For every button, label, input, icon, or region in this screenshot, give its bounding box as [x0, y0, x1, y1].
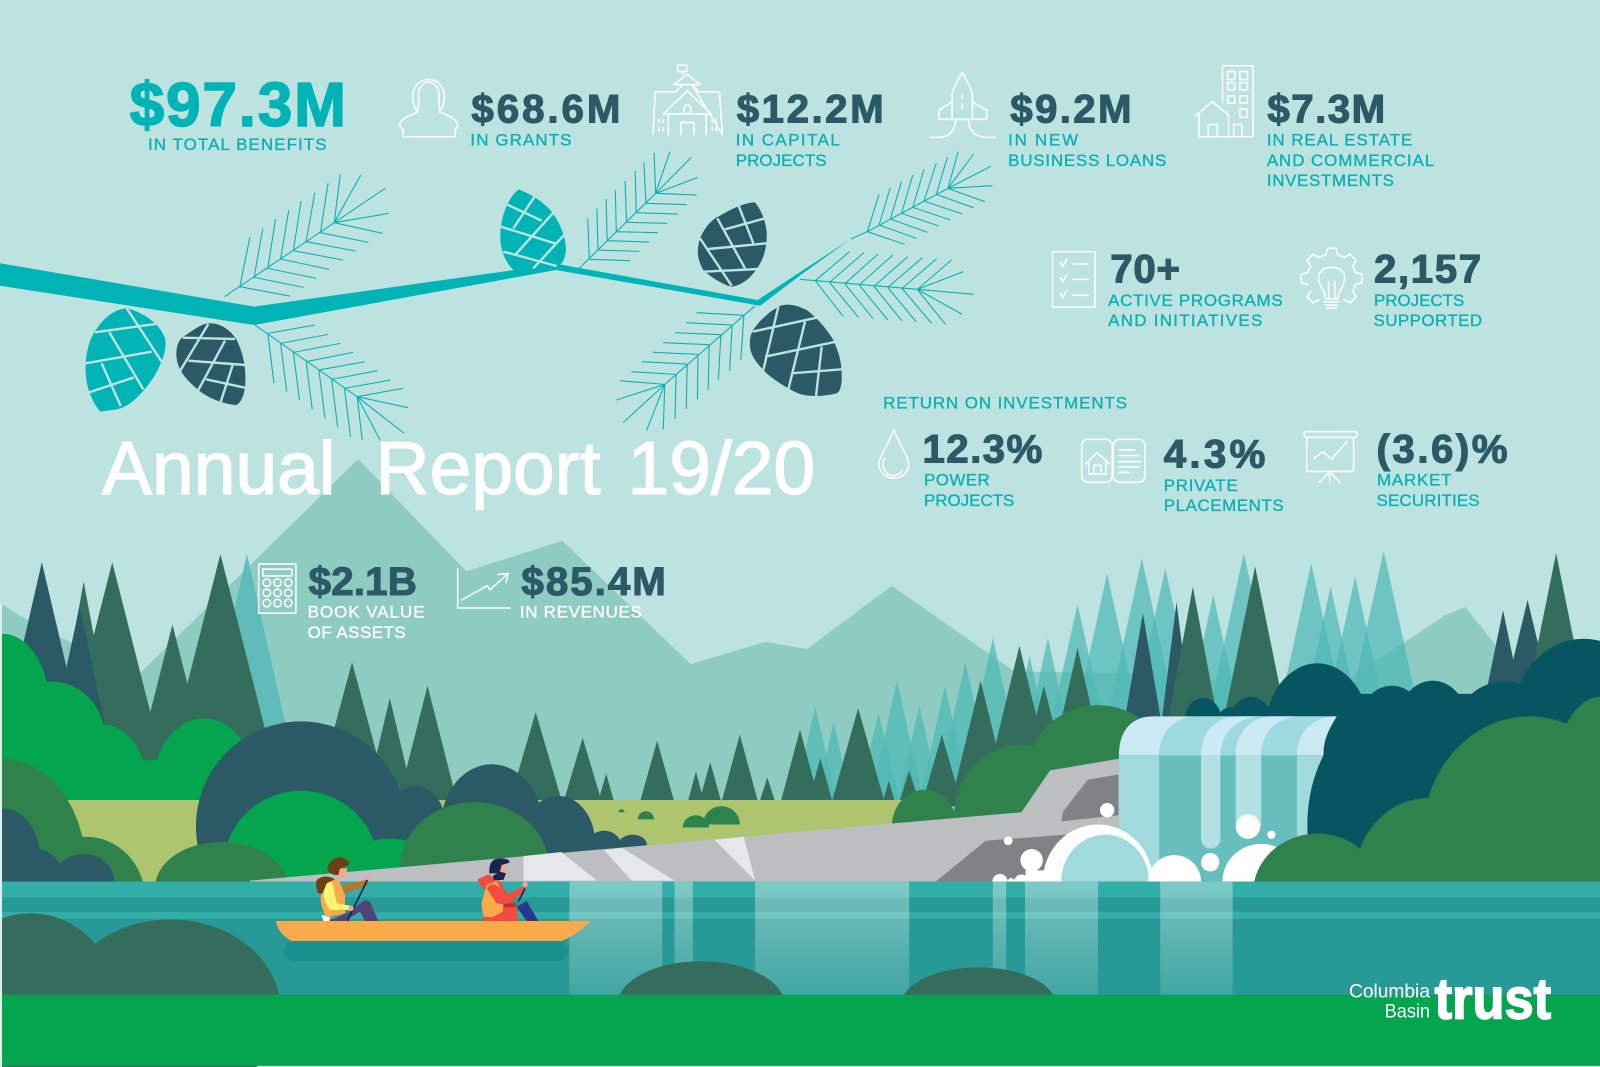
stat: book value: OF ASSETS	[308, 623, 406, 642]
boat hull	[276, 921, 591, 941]
bright inner bushes	[223, 791, 446, 944]
stat: active programs: ACTIVE PROGRAMS	[1108, 291, 1283, 310]
stat: private placements	[1164, 431, 1284, 515]
title: Annual	[102, 426, 336, 510]
icon: rocket	[930, 72, 995, 137]
stat: market securities: MARKET	[1377, 471, 1452, 490]
logo: Columbia Basin Trust: Basin	[1385, 1001, 1430, 1022]
stat: power projects: POWER	[924, 471, 990, 490]
slate trees	[0, 562, 1555, 806]
cone: slate left	[176, 323, 246, 405]
stat: capital projects: $12.2M	[737, 86, 884, 131]
small meadow bushes	[618, 806, 740, 828]
stat: capital projects: PROJECTS	[736, 151, 827, 170]
needles sprig A	[224, 174, 389, 297]
stat: real estate: IN REAL ESTATE	[1267, 131, 1412, 150]
boat with paddlers	[276, 857, 591, 961]
icon: school	[653, 65, 722, 135]
icon: growth chart	[458, 569, 510, 608]
cone: teal left	[86, 308, 166, 412]
dark teal forest	[1185, 639, 1600, 911]
icon: water drop	[879, 430, 909, 478]
pine needles left part	[224, 152, 755, 440]
stat: business loans: $9.2M	[1010, 86, 1132, 131]
teal tree left	[190, 554, 304, 806]
stat: book value: BOOK VALUE	[308, 602, 424, 621]
foam	[992, 803, 1300, 939]
left green bushes	[0, 759, 145, 976]
cone: slate top	[698, 202, 767, 287]
stat: capital projects	[736, 86, 884, 170]
icon: buildings	[1195, 66, 1253, 137]
cones left pair	[86, 308, 246, 412]
slate bush cluster	[196, 721, 647, 932]
stat: projects supported: PROJECTS	[1374, 291, 1464, 310]
stat: power projects: 12.3%	[922, 427, 1042, 472]
stat: total benefits: IN TOTAL BENEFITS	[148, 135, 327, 154]
boat shadow	[284, 941, 568, 961]
left margin strip	[0, 604, 2, 1067]
stat: real estate: INVESTMENTS	[1267, 171, 1394, 190]
stat: real estate: $7.3M	[1267, 86, 1385, 131]
needles sprig E	[800, 252, 973, 324]
icon: gear with bulb	[1301, 248, 1362, 308]
stat: grants: $68.6M	[471, 86, 620, 131]
stat: active programs	[1108, 247, 1283, 330]
stat: real estate: AND COMMERCIAL	[1267, 151, 1434, 170]
stat: market securities: SECURITIES	[1377, 491, 1480, 510]
logo: Columbia Basin Trust: Columbia	[1349, 982, 1430, 1003]
needles sprig B	[255, 325, 408, 440]
meadow	[2, 800, 908, 882]
dark green trees	[56, 553, 1600, 806]
stat: revenues: $85.4M	[521, 559, 666, 604]
green bushes by waterfall	[892, 705, 1169, 888]
green inner bush	[400, 802, 549, 933]
icon: book with house	[1082, 439, 1145, 482]
title: Report	[376, 426, 601, 510]
bright green bushes	[2, 634, 242, 800]
paddler: woman	[316, 857, 378, 921]
icon: calculator	[259, 564, 296, 613]
stat: business loans	[1008, 86, 1166, 170]
rock ledge	[250, 758, 1122, 882]
needles sprig D	[851, 152, 992, 244]
needles sprig C	[579, 152, 698, 268]
logo: Columbia Basin Trust	[1349, 967, 1551, 1031]
stat: market securities	[1377, 427, 1508, 510]
stat: active programs: 70+	[1110, 247, 1180, 292]
small green bush	[155, 842, 288, 934]
stat: projects supported: 2,157	[1374, 247, 1481, 292]
stat: revenues: IN REVENUES	[520, 602, 642, 621]
stat: capital projects: IN CAPITAL	[736, 131, 840, 150]
title: 19/20	[628, 426, 815, 510]
icon: presentation board	[1304, 432, 1357, 482]
stat: grants: IN GRANTS	[470, 131, 571, 150]
water	[2, 882, 1600, 996]
stat: projects supported	[1373, 247, 1482, 330]
water reflections	[569, 882, 1233, 995]
stat: active programs: AND INITIATIVES	[1108, 311, 1262, 330]
heading: return on investments: RETURN ON INVESTMENTS	[883, 394, 1127, 413]
stat: power projects: PROJECTS	[924, 491, 1014, 510]
pine branch	[0, 239, 851, 325]
stat: real estate	[1267, 86, 1434, 190]
slate tree in front	[51, 606, 108, 740]
logo: Columbia Basin Trust: trust	[1435, 967, 1551, 1031]
left slate bushes	[0, 808, 114, 914]
stat: total benefits: $97.3M	[130, 71, 346, 140]
rock highlights	[523, 837, 755, 881]
pine needles right part	[800, 152, 992, 324]
stat: business loans: BUSINESS LOANS	[1008, 151, 1166, 170]
stat: private placements: PRIVATE	[1164, 476, 1238, 495]
stat: power projects	[922, 427, 1042, 510]
stat: projects supported: SUPPORTED	[1373, 311, 1482, 330]
stat: private placements: PLACEMENTS	[1164, 496, 1284, 515]
paddler: man	[477, 858, 538, 921]
icon: checklist	[1053, 252, 1095, 307]
cone: slate large	[750, 305, 842, 396]
cone: teal top	[500, 189, 566, 271]
stat: business loans: IN NEW	[1008, 131, 1078, 150]
icon: person	[400, 80, 458, 137]
light teal trees	[793, 551, 1440, 806]
waterfall	[1119, 716, 1337, 882]
shore bushes	[0, 913, 1056, 1067]
needles sprig F	[616, 306, 755, 431]
stat: book value	[308, 559, 424, 642]
foreground grass	[2, 995, 1600, 1066]
stat: market securities: (3.6)%	[1377, 427, 1508, 472]
rock shadows	[936, 774, 1118, 882]
stat: private placements: 4.3%	[1164, 431, 1265, 476]
mountains	[2, 459, 1600, 888]
right green bushes	[1253, 697, 1600, 957]
stat: book value: $2.1B	[309, 559, 417, 604]
